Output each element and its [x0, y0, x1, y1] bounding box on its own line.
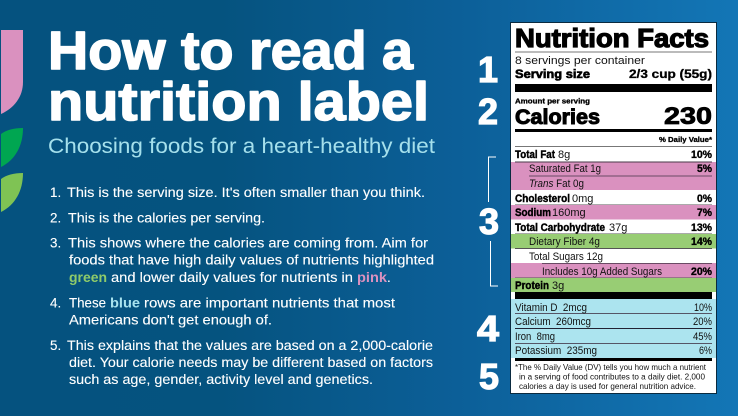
list item 4: These: [69, 296, 106, 310]
list item 3: and lower daily values for nutrients in: [111, 270, 353, 285]
title: How to read a: [48, 21, 414, 81]
row: cholesterol: 0mg: [572, 193, 593, 205]
row: total carbohydrate: 13%: [691, 222, 712, 234]
row: sodium: 160mg: [552, 207, 586, 219]
row: protein: Protein: [515, 280, 549, 292]
list item 4: blue: [110, 296, 140, 310]
servings: 8 servings per container: [515, 55, 645, 67]
panel: nutrition facts label: [510, 22, 716, 394]
list item 3: green: [69, 270, 107, 285]
footnote: in a serving of food contributes to a daily diet. 2,000: [519, 372, 705, 382]
list item 4: 4.: [50, 296, 61, 310]
callout number 4: 4: [477, 308, 499, 349]
footnote: [515, 362, 707, 391]
list item 4: rows are important nutrients that most: [144, 296, 395, 310]
row: protein: [511, 278, 716, 292]
row: total fat: 10%: [691, 149, 712, 161]
row: total fat: 8g: [558, 149, 570, 161]
icon: light green leaf: [1, 173, 23, 212]
title: [48, 21, 429, 132]
blue rows: vitamins and minerals: 6%: [699, 345, 712, 357]
list item 3: [50, 236, 434, 285]
blue rows: vitamins and minerals: Potassium 235mg: [515, 345, 597, 357]
row: total sugars: Total Sugars 12g: [529, 251, 603, 263]
footnote: calories a day is used for general nutrition advice.: [519, 381, 696, 391]
blue rows: vitamins and minerals: [511, 299, 716, 358]
list item 3: .: [387, 270, 391, 285]
row: total carbohydrate: [515, 222, 712, 234]
callout number 2: 2: [478, 91, 498, 132]
calories: Amount per serving: [515, 98, 590, 106]
subtitle: Choosing foods for a heart-healthy diet: [48, 135, 435, 158]
row: total fat: [515, 149, 712, 161]
blue rows: vitamins and minerals: Calcium 260mcg: [515, 316, 591, 328]
list item 5: [50, 338, 433, 387]
blue rows: vitamins and minerals: 10%: [694, 302, 712, 314]
row: total carbohydrate: 37g: [609, 222, 627, 234]
list item 3: This shows where the calories are coming from. Aim for: [68, 236, 429, 250]
list item 5: such as age, gender, activity level and genetics.: [69, 372, 373, 387]
blue rows: vitamins and minerals: 20%: [693, 316, 712, 328]
row: sodium: 7%: [697, 207, 712, 219]
icon: pink petal: [1, 30, 23, 114]
callout number 1: 1: [478, 49, 498, 90]
row: protein: 3g: [552, 280, 564, 292]
callout number 3 with bracket: 3: [479, 201, 499, 242]
daily value heading: % Daily Value*: [659, 135, 712, 144]
blue rows: vitamins and minerals: Vitamin D 2mcg: [515, 302, 587, 314]
list item 1: 1.: [50, 185, 61, 200]
list item 5: This explains that the values are based on a 2,000-calorie: [67, 338, 433, 353]
title: nutrition label: [48, 72, 429, 132]
calories: 230: [664, 103, 712, 130]
pink rows: saturated and trans fat: [511, 162, 716, 190]
row: cholesterol: [515, 193, 712, 206]
list item 2: This is the calories per serving.: [68, 210, 265, 226]
list item 5: diet. Your calorie needs may be different based on factors: [69, 355, 433, 370]
list item 4: [50, 296, 395, 328]
row: dietary fiber: Dietary Fiber 4g: [529, 236, 600, 248]
list item 5: 5.: [50, 338, 61, 353]
footnote: *The % Daily Value (DV) tells you how much a nutrient: [515, 362, 707, 372]
list item 3: 3.: [50, 236, 61, 250]
list item 1: This is the serving size. It's often smaller than you think.: [67, 185, 425, 200]
servings: 2/3 cup (55g): [629, 69, 712, 81]
row: dietary fiber: [511, 234, 716, 249]
row: added sugars: Includes 10g Added Sugars: [542, 266, 662, 278]
label heading: Nutrition Facts: [515, 23, 709, 53]
row: dietary fiber: 14%: [691, 236, 712, 248]
list item 3: foods that have high daily values of nutrients highlighted: [69, 252, 434, 268]
servings: Serving size: [515, 69, 590, 81]
row: cholesterol: Cholesterol: [515, 193, 570, 205]
list item 3: pink: [357, 270, 388, 285]
row: added sugars: [511, 263, 716, 278]
pink rows: saturated and trans fat: Saturated Fat 1g: [529, 163, 601, 175]
row: sodium: Sodium: [515, 207, 551, 219]
calories: [515, 98, 712, 130]
icon: green leaf: [1, 128, 23, 167]
blue rows: vitamins and minerals: 45%: [693, 331, 712, 343]
calories: Calories: [515, 106, 600, 129]
row: cholesterol: 0%: [697, 193, 712, 205]
callout number 3 with bracket: [479, 157, 499, 286]
callout number 5: 5: [479, 356, 499, 397]
blue rows: vitamins and minerals: Iron 8mg: [515, 331, 555, 343]
pink rows: saturated and trans fat: 5%: [697, 163, 712, 175]
pink rows: saturated and trans fat: Trans Fat 0g: [529, 178, 584, 190]
row: sodium: [511, 205, 716, 220]
servings: [515, 55, 712, 81]
row: total fat: Total Fat: [515, 149, 555, 161]
row: added sugars: 20%: [691, 266, 712, 278]
list item 4: Americans don't get enough of.: [69, 312, 272, 328]
list item 2: 2.: [50, 210, 61, 226]
row: total carbohydrate: Total Carbohydrate: [515, 222, 605, 234]
